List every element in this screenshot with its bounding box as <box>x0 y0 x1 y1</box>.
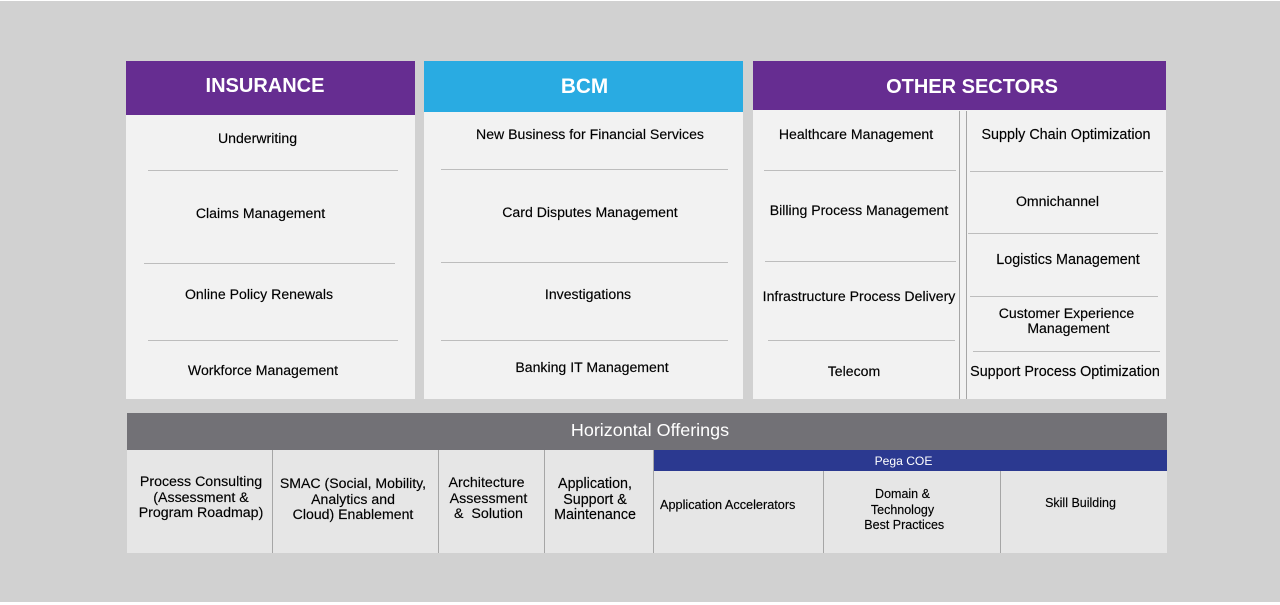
heading: horizontal offerings <box>127 413 1167 450</box>
item: support process: Support Process Optimization <box>970 364 1160 380</box>
item: architecture: Assessment <box>450 490 527 506</box>
item: smac: SMAC (Social, Mobility, <box>280 475 426 491</box>
panel: horizontal offerings <box>127 413 1167 553</box>
item: healthcare: Healthcare Management <box>779 126 933 142</box>
item: claims management: Claims Management <box>196 205 325 221</box>
item: smac <box>280 475 426 522</box>
item: domain and technology <box>864 487 944 532</box>
item: process consulting <box>139 474 263 521</box>
item: domain and technology: Domain & <box>875 487 930 501</box>
item: smac: Analytics and <box>311 490 395 506</box>
panel: insurance <box>126 61 415 399</box>
item: application support: Maintenance <box>554 507 636 523</box>
item: underwriting: Underwriting <box>218 130 297 146</box>
item: architecture: Architecture <box>448 475 525 491</box>
sub-heading: pega coe <box>654 450 1167 471</box>
item: investigations: Investigations <box>545 286 631 302</box>
item: omnichannel: Omnichannel <box>1016 193 1099 209</box>
heading: insurance: INSURANCE <box>206 75 324 97</box>
item: smac: Cloud) Enablement <box>293 506 413 522</box>
heading: bcm <box>424 61 743 112</box>
panel: other sectors <box>753 61 1166 399</box>
item: supply chain: Supply Chain Optimization <box>981 127 1151 143</box>
item: skill building: Skill Building <box>1045 496 1116 510</box>
heading: insurance <box>126 61 415 115</box>
item: logistics: Logistics Management <box>996 252 1140 268</box>
item: process consulting: (Assessment & <box>153 490 249 506</box>
item: online policy renewals: Online Policy Renewals <box>185 286 333 302</box>
item: customer experience: Management <box>1027 320 1110 336</box>
sub-heading: pega coe: Pega COE <box>875 454 932 468</box>
item: process consulting: Program Roadmap) <box>139 505 263 521</box>
item: application support <box>554 476 636 523</box>
item: workforce management: Workforce Management <box>188 362 338 378</box>
item: domain and technology: Technology <box>871 502 934 516</box>
item: telecom: Telecom <box>828 363 880 379</box>
item: customer experience: Customer Experience <box>999 305 1134 321</box>
item: process consulting: Process Consulting <box>140 474 262 490</box>
item: architecture: & Solution <box>454 506 523 522</box>
item: application support: Support & <box>563 492 627 508</box>
heading: other sectors <box>753 61 1166 110</box>
item: banking it: Banking IT Management <box>515 359 669 375</box>
item: new business: New Business for Financial Services <box>476 126 704 142</box>
item: architecture <box>448 475 528 522</box>
item: application accelerators: Application Accelerators <box>660 498 795 512</box>
panel: bcm <box>424 61 743 399</box>
heading: other sectors: OTHER SECTORS <box>886 76 1058 98</box>
heading: bcm: BCM <box>561 75 608 98</box>
item: billing: Billing Process Management <box>770 202 948 218</box>
item: card disputes: Card Disputes Management <box>502 204 678 220</box>
item: application support: Application, <box>558 476 632 492</box>
item: infrastructure: Infrastructure Process Delivery <box>763 288 955 304</box>
item: domain and technology: Best Practices <box>864 518 944 532</box>
heading: horizontal offerings: Horizontal Offerings <box>571 420 729 440</box>
item: customer experience <box>999 305 1134 336</box>
